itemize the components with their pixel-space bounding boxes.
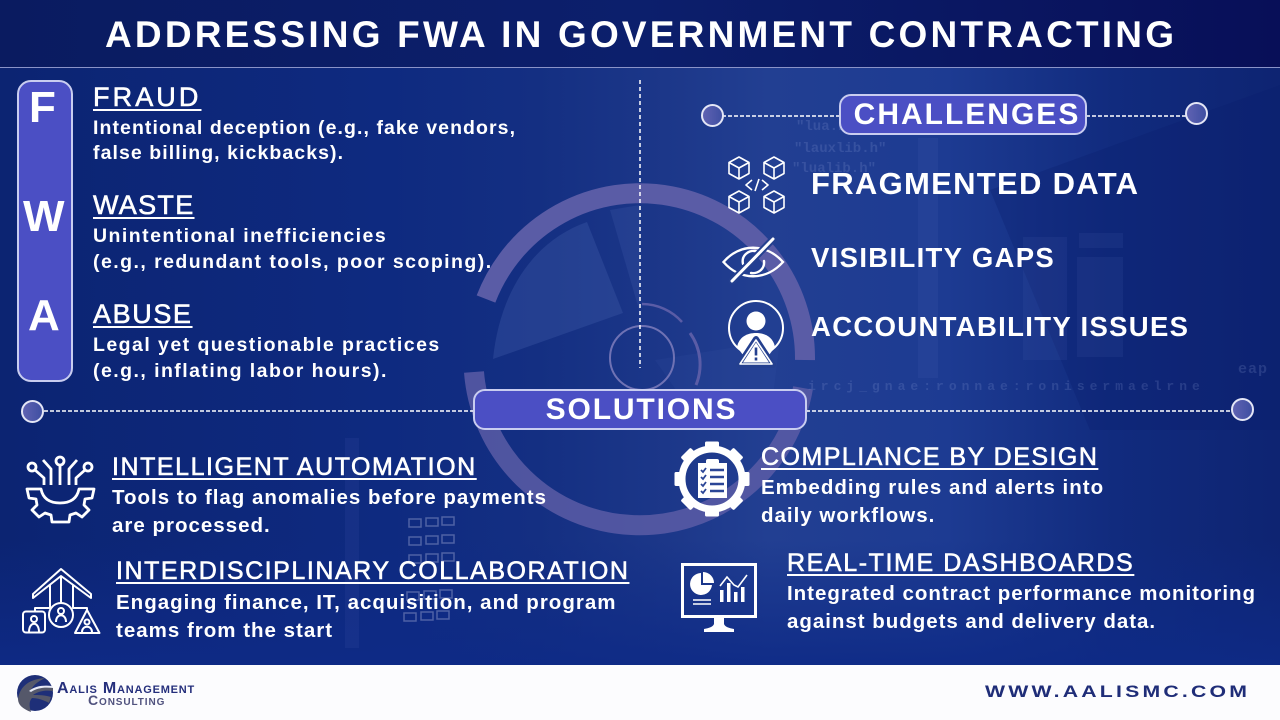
text: waste description	[93, 225, 493, 272]
text: abuse description: (e.g., inflating labor hours).	[93, 360, 388, 382]
text: collaboration description: teams from the start	[116, 619, 333, 642]
icon: dashboard monitor	[681, 563, 757, 632]
text: "lauxlib.h"	[794, 141, 886, 157]
heading: fraud: FRAUD	[93, 82, 202, 112]
text: intelligent automation description	[112, 486, 547, 537]
heading: challenges: CHALLENGES	[854, 98, 1080, 130]
text: dashboards description	[787, 582, 1256, 633]
text: compliance description: Embedding rules and alerts into	[761, 476, 1104, 499]
text: intelligent automation description: are processed.	[112, 514, 271, 537]
challenges left node	[701, 104, 724, 127]
text: collaboration description	[116, 591, 616, 642]
panel: waste	[92, 190, 493, 272]
text: "lualib.h"	[792, 161, 876, 177]
panel: fraud	[93, 82, 516, 164]
letter W: W	[23, 192, 65, 241]
text: compliance description: daily workflows.	[761, 504, 935, 527]
icon: collaboration	[22, 568, 100, 634]
text: ircj_gnae:ronnae:ronisermaelrne	[808, 379, 1205, 394]
text: waste description: Unintentional inefficiencies	[93, 225, 387, 247]
text: dashboards description: against budgets and delivery data.	[787, 610, 1156, 633]
icon: person with warning	[728, 300, 784, 365]
text: abuse description	[93, 334, 441, 382]
text: "lua.h"	[796, 119, 855, 135]
heading: solutions: SOLUTIONS	[546, 392, 737, 426]
icon: fragmented data cubes	[728, 156, 785, 214]
text: fraud description: Intentional deception (e.g., fake vendors,	[93, 117, 516, 139]
text: waste description: (e.g., redundant tools, poor scoping).	[93, 250, 493, 272]
heading: waste: WASTE	[93, 190, 195, 220]
text: visibility gaps: VISIBILITY GAPS	[811, 242, 1055, 273]
text: fragmented data: FRAGMENTED DATA	[811, 166, 1139, 201]
challenges right node	[1185, 102, 1208, 125]
icon: automation gear	[26, 456, 96, 524]
title banner	[0, 0, 1280, 68]
text: collaboration description: Engaging finance, IT, acquisition, and program	[116, 591, 616, 614]
heading: real-time dashboards: REAL-TIME DASHBOARDS	[787, 549, 1134, 577]
letter A: A	[28, 291, 60, 340]
text: intelligent automation description: Tools to flag anomalies before payments	[112, 486, 547, 509]
panel: abuse	[92, 299, 441, 382]
text: fraud description: false billing, kickbacks).	[93, 142, 344, 164]
panel: FWA letter bar	[17, 80, 73, 382]
text: abuse description: Legal yet questionable practices	[93, 334, 441, 356]
logo subtitle: Consulting	[88, 692, 165, 708]
letter F: F	[29, 83, 56, 132]
heading: abuse: ABUSE	[93, 299, 193, 329]
website: WWW.AALISMC.COM	[985, 682, 1250, 701]
icon: crossed eye	[722, 237, 784, 283]
logo name: Aalis Management	[57, 680, 195, 697]
footer bar	[0, 665, 1280, 720]
solutions left node	[21, 400, 44, 423]
heading: solutions	[473, 389, 807, 430]
text: accountability issues: ACCOUNTABILITY ISSUES	[811, 311, 1189, 342]
heading: compliance by design: COMPLIANCE BY DESIGN	[761, 443, 1098, 471]
title: ADDRESSING FWA IN GOVERNMENT CONTRACTING	[105, 14, 1177, 55]
icon: compliance gear	[674, 442, 750, 516]
solutions right node	[1231, 398, 1254, 421]
text: compliance description	[761, 476, 1104, 527]
logo globe	[17, 675, 53, 712]
text: eap	[1238, 361, 1268, 378]
text: fraud description	[93, 117, 516, 164]
heading: intelligent automation: INTELLIGENT AUTOMATION	[112, 453, 477, 481]
text: dashboards description: Integrated contract performance monitoring	[787, 582, 1256, 605]
heading: interdisciplinary collaboration: INTERDISCIPLINARY COLLABORATION	[116, 557, 629, 585]
